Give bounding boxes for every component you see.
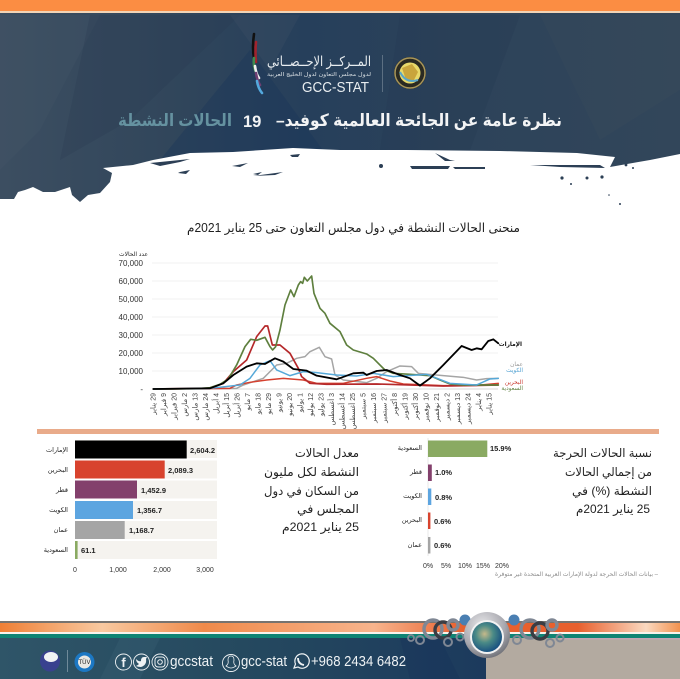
bar values: 0.8% [435,493,452,502]
x axis date labels: 7 مايو [245,393,252,411]
bar axis labels: 1,000 [109,567,127,574]
x axis date labels: 20 فبراير [172,393,178,421]
bar category labels: الكويت [403,493,422,500]
title [118,111,562,131]
x axis date labels: 25 أغسطس [348,393,357,429]
x axis date labels: 1 يوليو [298,393,304,413]
bar values: 1,452.9 [141,486,166,495]
series legend labels: السعودية [501,386,523,392]
y axis labels: 50,000 [119,295,144,304]
x axis date labels: 9 فبراير [161,393,168,417]
bar axis labels: 0 [73,567,77,574]
text block: critical cases: من إجمالي الحالات [565,465,652,480]
title subject: الحالات النشطة [118,111,232,130]
series: Qatar [153,326,498,389]
logo subtitle: لدول مجلس التعاون لدول الخليج العربية [267,72,372,78]
bar values: 2,089.3 [168,466,193,475]
y axis labels: 20,000 [119,349,144,358]
bar values: 15.9% [490,444,512,453]
bar category labels: البحرين [48,467,68,474]
bar category labels: الكويت [49,507,68,514]
logo name text: المــركــز الإحــصــائي [267,54,371,70]
y axis labels: 60,000 [119,277,144,286]
series: Oman [153,347,498,389]
bar values: 61.1 [81,546,96,555]
bar axis labels: 15% [476,563,490,570]
x axis date labels: 16 سبتمبر [371,393,378,424]
y axis labels: 30,000 [119,331,144,340]
series legend labels: البحرين [505,380,523,386]
x axis date labels: 30 أكتوبر [411,393,420,421]
x axis date labels: 29 مايو [266,393,273,415]
bar axis labels: 10% [458,563,472,570]
title main text: نظرة عامة عن الجائحة العالمية كوفيد– [276,111,562,131]
icon: facebook [116,654,132,670]
title number: 19 [243,113,261,131]
y axis labels [119,259,144,394]
bar axis labels: 20% [495,563,509,570]
bar category labels: عمان [408,542,422,549]
text block: rate per million: المجلس في [297,502,359,517]
phone number: +968 2434 6482 [311,654,406,670]
x axis date labels: 4 يناير [476,393,483,412]
bar chart: active cases per million [44,440,217,574]
logo stripes [253,34,262,93]
x axis date labels: 12 يوليو [308,393,315,417]
x axis date labels: 21 نوفمبر [434,393,441,423]
text block: rate per million: 25 يناير 2021م [282,520,359,535]
handle: gcc-stat: gcc-stat [241,654,287,670]
icon: TUV logo: TÜV [78,659,90,666]
x axis date labels: 13 مارس [192,393,200,421]
bar values: 2,604.2 [190,446,215,455]
bar values: 1,356.7 [137,506,162,515]
y axis labels: 10,000 [119,367,144,376]
bar values [434,444,512,550]
bar values [81,446,215,555]
footer band [0,621,680,679]
bar axis labels [73,567,214,574]
x axis date labels: 29 يناير [150,393,158,416]
x axis date labels: 24 ديسمبر [466,393,472,425]
text block: critical cases: 25 يناير 2021م [576,502,650,517]
bar category labels [398,445,422,549]
bar values: 0.6% [434,541,451,550]
x axis date labels: 27 سبتمبر [382,393,388,424]
icon: globe emblem with rings [408,612,564,658]
text block: critical cases [553,446,652,517]
series legend labels [499,342,523,392]
x axis date labels: 14 أغسطس [338,393,346,429]
icon: GCC emblem [394,57,426,89]
x axis date labels: 4 أبريل [212,393,220,414]
bar category labels: السعودية [398,445,422,452]
x axis date labels: 26 أبريل [232,393,242,418]
header banner background [0,13,680,210]
x axis date labels: 19 أكتوبر [400,393,410,421]
icon: whatsapp [294,654,309,668]
x axis date labels: 2 ديسمبر [444,393,452,421]
x axis date labels: 5 سبتمبر [360,393,368,420]
line chart [119,251,523,429]
bar category labels: قطر [55,487,68,494]
series: Kuwait [153,361,498,389]
text block: rate per million: معدل الحالات [295,446,359,460]
bar category labels: عمان [54,527,68,534]
logo: GCC-STAT [253,34,426,96]
bar category labels: الإمارات [46,447,68,454]
x axis date labels: 18 مايو [256,393,262,415]
text block: rate per million: النشطة لكل مليون [264,465,359,480]
bar axis labels: 5% [441,563,451,570]
bar category labels: قطر [409,469,422,476]
text block: rate per million: من السكان في دول [264,484,359,499]
x axis date labels: 13 ديسمبر [455,393,462,425]
white brush edge of header [0,148,680,215]
icon: instagram [152,654,168,670]
y axis labels: 70,000 [119,259,144,268]
bars [75,440,187,458]
series legend labels: عمان [510,362,523,368]
y axis labels: 40,000 [119,313,144,322]
bar category labels [44,447,68,554]
text block: rate per million [264,446,359,535]
icon: snapchat [222,654,240,672]
series: UAE [153,339,498,389]
chart title: منحنى الحالات النشطة في دول مجلس التعاون حتى 25 يناير 2021م [187,221,520,236]
bar category labels: السعودية [44,547,68,554]
x axis date labels: 15 يناير [486,393,494,416]
bar category labels: البحرين [402,517,422,524]
x axis date labels: 3 أغسطس [327,393,336,425]
bar values: 0.6% [434,517,451,526]
y axis title: عدد الحالات [119,251,148,258]
bar axis labels: 0% [423,563,433,570]
x axis date labels: 24 مارس [203,393,210,421]
series legend labels: الإمارات [499,342,522,348]
footer logos [40,650,94,672]
series: Bahrain [153,377,498,389]
bar values: 1.0% [435,468,452,477]
series legend labels: الكويت [506,367,523,374]
contact line [116,654,406,672]
orange top bar [0,0,680,13]
x axis date labels: 10 نوفمبر [424,393,430,423]
x axis date labels: 2 مارس [182,393,189,417]
text block: critical cases: النشطة (%) في [572,484,652,498]
x axis date labels: 8 أكتوبر [390,393,399,417]
icon: facebook: f [121,655,126,670]
x axis date labels [150,393,494,429]
bar axis labels [423,563,509,570]
icon: accreditation logo [40,650,60,672]
peach divider [37,429,659,434]
bars [428,440,487,457]
text block: critical cases: نسبة الحالات الحرجة [553,446,652,461]
bar axis labels: 3,000 [196,567,214,574]
bar values: 1,168.7 [129,526,154,535]
x axis date labels: 9 يونيو [276,393,284,413]
logo latin name: GCC-STAT [302,80,369,96]
x axis date labels: 20 يونيو [287,393,294,417]
footnote: – بيانات الحالات الحرجة لدولة الإمارات العربية المتحدة غير متوفرة [495,571,659,578]
y axis labels: - [140,385,143,394]
handle: gccstat: gccstat [170,654,213,670]
bar axis labels: 2,000 [153,567,171,574]
icon: twitter [134,654,150,670]
x axis date labels: 15 أبريل [222,393,231,418]
series lines [153,276,498,389]
bar chart: critical cases share [398,438,512,570]
x axis date labels: 23 يوليو [318,393,326,417]
series: Saudi Arabia [153,276,498,389]
